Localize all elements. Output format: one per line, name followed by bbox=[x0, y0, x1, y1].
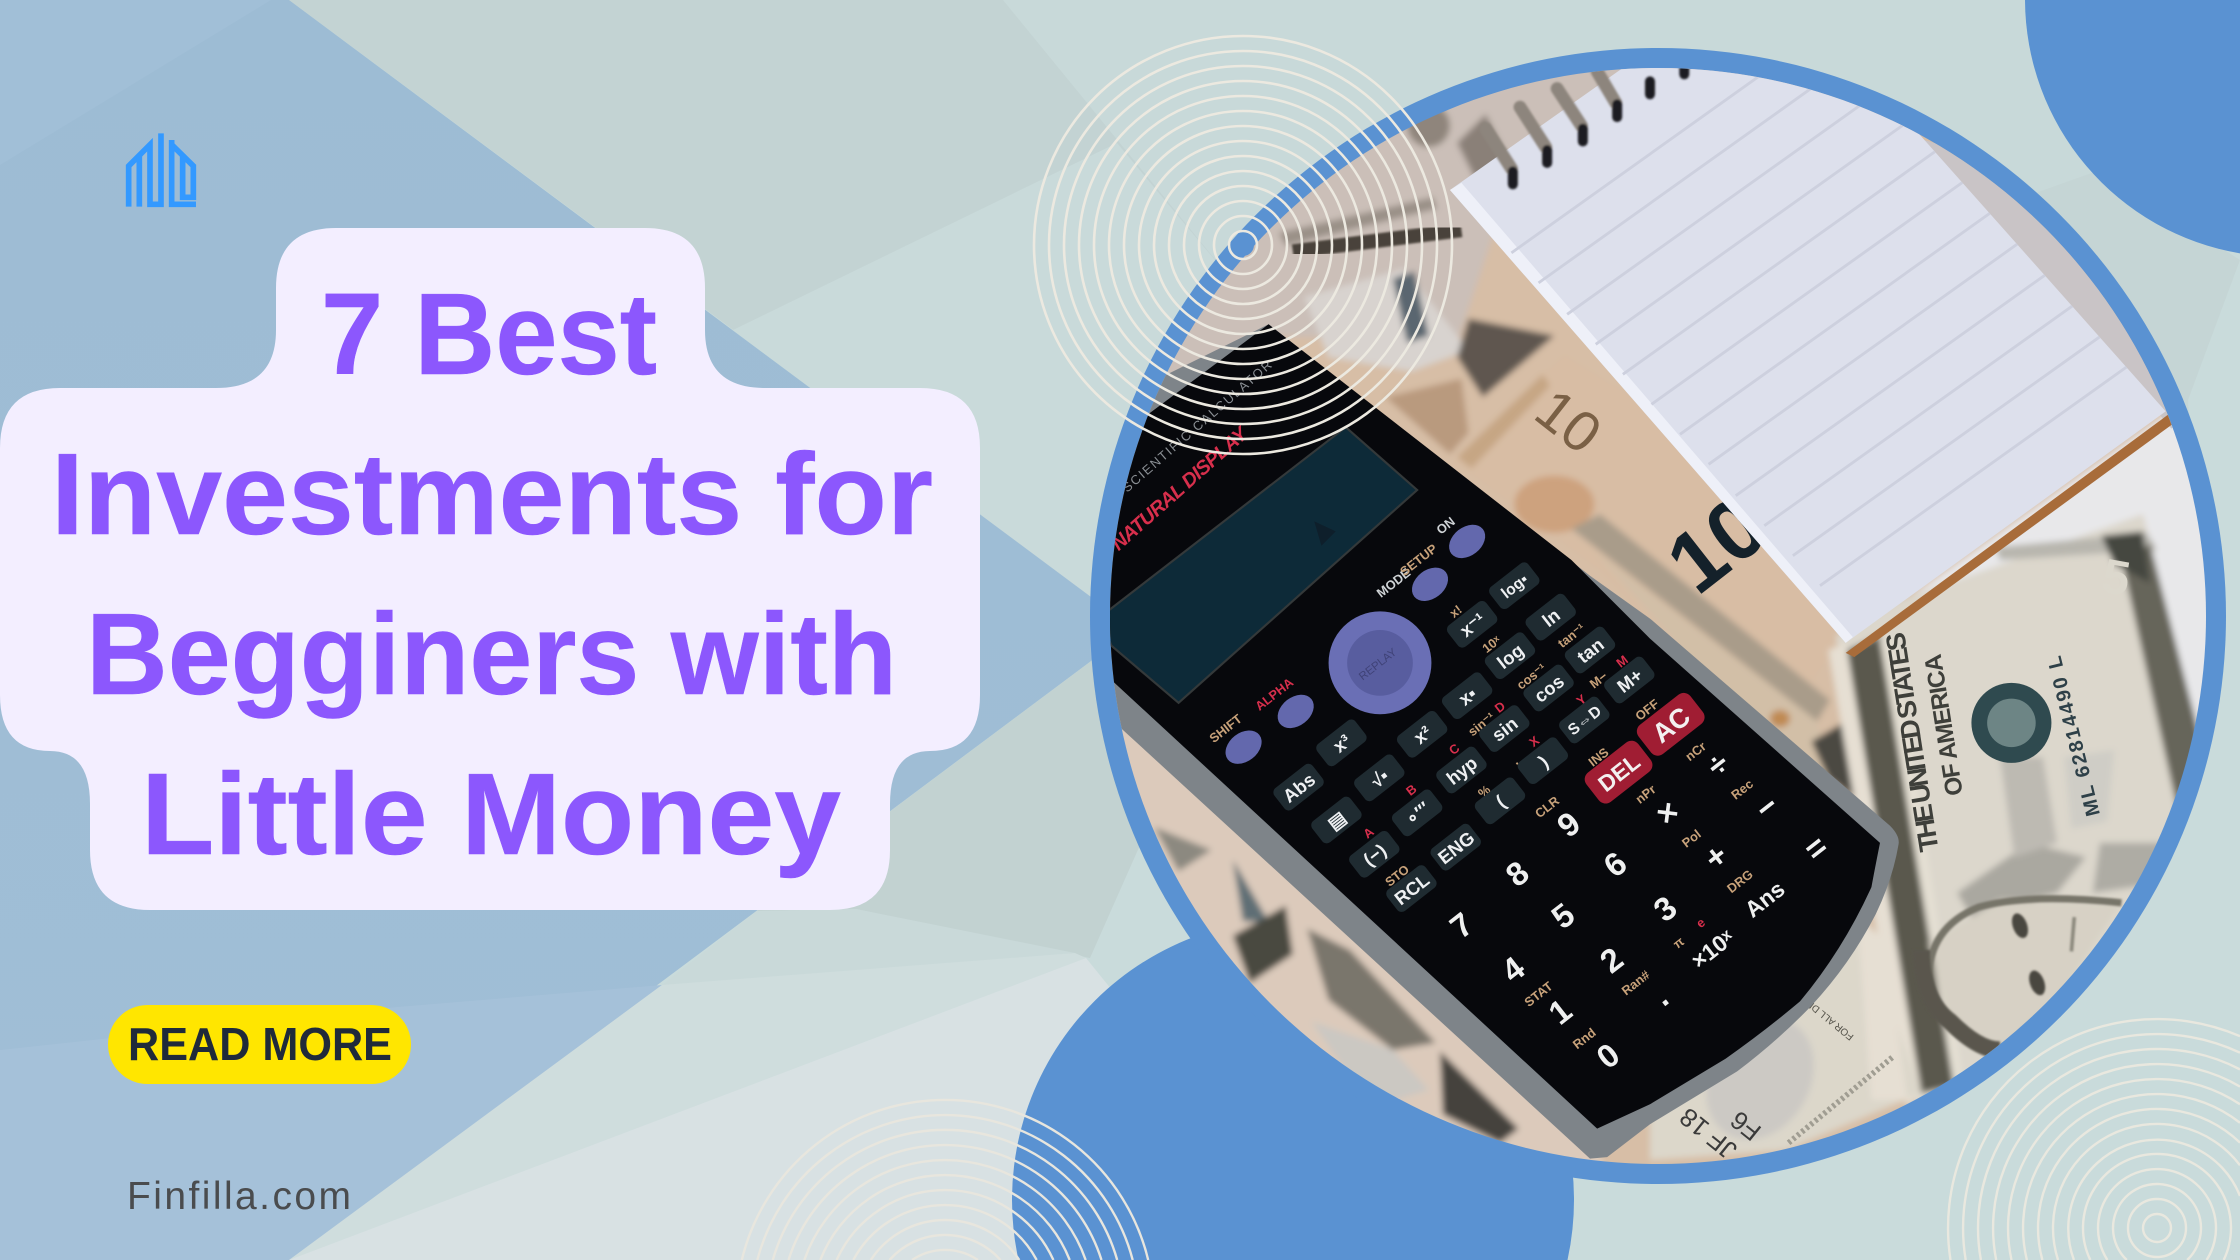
title panel bbox=[0, 228, 980, 910]
calculator body bbox=[1057, 324, 1880, 1129]
number keys: 2 bbox=[1593, 940, 1630, 980]
function keys: Abs bbox=[1279, 769, 1319, 807]
small key captions: Rnd bbox=[1570, 1025, 1599, 1052]
function keys: x² bbox=[1410, 721, 1436, 748]
photo ring bbox=[1090, 48, 2226, 1184]
bill details: 10 bbox=[1650, 478, 1784, 612]
decorative blue circle bottom bbox=[1012, 919, 1574, 1260]
number keys: 4 bbox=[1494, 949, 1532, 989]
small key captions: Y bbox=[1573, 691, 1590, 708]
small key captions: D bbox=[1492, 698, 1508, 716]
small key captions: X bbox=[1526, 732, 1542, 750]
small key captions: x! bbox=[1446, 602, 1465, 621]
number keys: + bbox=[1697, 836, 1735, 877]
small key captions bbox=[1206, 514, 1756, 1052]
number keys: 9 bbox=[1550, 804, 1587, 844]
title text: Little Money bbox=[141, 749, 841, 879]
bill details: F6 bbox=[1726, 1105, 1767, 1146]
function keys: ( bbox=[1491, 791, 1510, 812]
function keys bbox=[1271, 560, 1657, 914]
read more button: READ MORE bbox=[128, 1018, 392, 1070]
small key captions: 10ˣ bbox=[1479, 632, 1504, 656]
function keys: sin bbox=[1488, 713, 1522, 746]
function keys: (−) bbox=[1359, 839, 1390, 870]
small key captions: cos⁻¹ bbox=[1514, 660, 1549, 693]
read more button bbox=[108, 1005, 411, 1084]
small key captions: π bbox=[1670, 934, 1687, 952]
small key captions: SETUP bbox=[1397, 540, 1440, 579]
number keys: 8 bbox=[1499, 853, 1536, 894]
bill details: FOR ALL DEBTS bbox=[1789, 985, 1856, 1042]
small key captions: MODE bbox=[1374, 565, 1414, 600]
function keys: ENG bbox=[1434, 827, 1478, 868]
number keys: . bbox=[1645, 978, 1675, 1013]
function keys: cos bbox=[1530, 670, 1568, 707]
number keys bbox=[1443, 744, 1835, 1076]
number keys: 5 bbox=[1544, 895, 1581, 936]
number keys: ÷ bbox=[1699, 744, 1736, 784]
bill details: 10 bbox=[1523, 377, 1613, 467]
small key captions: C bbox=[1446, 740, 1462, 758]
concentric rings bottom right bbox=[1948, 1019, 2240, 1260]
small key captions: OFF bbox=[1632, 696, 1662, 724]
function keys: RCL bbox=[1390, 869, 1433, 909]
function keys: √▪ bbox=[1367, 765, 1393, 792]
bill details: ML 62814490 L bbox=[2044, 654, 2105, 818]
small key captions: Rec bbox=[1728, 776, 1756, 802]
title text bbox=[51, 269, 933, 879]
bill details: THE UNITED STATES bbox=[1879, 630, 1944, 854]
small key captions: ALPHA bbox=[1252, 675, 1296, 714]
decorative blue circle top right bbox=[2025, 0, 2240, 253]
logo icon: building mark bbox=[129, 133, 196, 207]
concentric rings bottom centre bbox=[742, 1100, 1148, 1260]
function keys: ) bbox=[1534, 751, 1552, 771]
function keys: ▤ bbox=[1323, 807, 1350, 834]
function keys: log▪ bbox=[1498, 571, 1532, 602]
small key captions: A bbox=[1360, 824, 1377, 841]
small key captions: sin⁻¹ bbox=[1465, 709, 1498, 739]
brand: NATURAL DISPLAY bbox=[1107, 422, 1253, 555]
small key captions: e bbox=[1693, 915, 1708, 931]
number keys: 7 bbox=[1443, 905, 1480, 945]
notepad bbox=[1450, 68, 2172, 657]
small key captions: Ran# bbox=[1619, 967, 1653, 998]
bill details: JF 18 bbox=[1675, 1102, 1742, 1164]
small key captions: ON bbox=[1433, 514, 1458, 537]
spiral binding bbox=[1486, 66, 1684, 184]
circular photo: calculator, notepad and dollar bills bbox=[1110, 68, 2206, 1164]
brand: SCIENTIFIC CALCULATOR bbox=[1119, 357, 1275, 495]
function keys: S⇔D bbox=[1565, 703, 1605, 739]
number keys: 3 bbox=[1646, 888, 1684, 929]
website label: Finfilla.com bbox=[127, 1175, 351, 1218]
small key captions: Pol bbox=[1679, 826, 1704, 850]
small key captions: M bbox=[1613, 652, 1631, 670]
function keys: x▪ bbox=[1454, 683, 1481, 710]
number keys: = bbox=[1797, 827, 1835, 868]
brand bbox=[1107, 357, 1275, 555]
function keys: x⁻¹ bbox=[1456, 608, 1489, 641]
function keys: log bbox=[1493, 639, 1528, 673]
round purple keys bbox=[1219, 518, 1492, 771]
small key captions: STAT bbox=[1521, 978, 1556, 1010]
replay pad: REPLAY bbox=[1357, 646, 1400, 683]
bill details: OF AMERICA bbox=[1920, 652, 1969, 798]
title text: Begginers with bbox=[86, 589, 897, 719]
number keys: ×10ˣ bbox=[1686, 924, 1740, 974]
calculator shell bbox=[1057, 324, 1899, 1159]
small key captions: nCr bbox=[1682, 739, 1709, 764]
small key captions: SHIFT bbox=[1206, 711, 1245, 746]
calculator bbox=[1057, 324, 1899, 1159]
small key captions: B bbox=[1403, 781, 1420, 799]
function keys: ln bbox=[1538, 604, 1564, 631]
small key captions: tan⁻¹ bbox=[1555, 620, 1588, 651]
function keys: tan bbox=[1573, 634, 1608, 667]
small key captions: % bbox=[1475, 781, 1494, 801]
concentric rings over the photo bbox=[1034, 36, 1452, 454]
display bbox=[1100, 427, 1417, 703]
small key captions: nPr bbox=[1633, 782, 1659, 807]
small key captions: , bbox=[1509, 754, 1521, 768]
number keys: − bbox=[1748, 786, 1785, 827]
replay pad bbox=[1329, 611, 1431, 714]
function keys: hyp bbox=[1442, 752, 1481, 789]
title text: 7 Best bbox=[321, 269, 657, 399]
red keys bbox=[1584, 692, 1705, 804]
function keys: x³ bbox=[1329, 730, 1355, 757]
small key captions: DRG bbox=[1724, 867, 1756, 896]
number keys: Ans bbox=[1740, 875, 1790, 923]
pen bbox=[1293, 230, 1461, 251]
red keys: AC bbox=[1646, 700, 1696, 749]
bill details: 5 bbox=[2098, 549, 2134, 607]
number keys: 1 bbox=[1541, 991, 1579, 1032]
small key captions: M− bbox=[1587, 668, 1610, 691]
title text: Investments for bbox=[51, 429, 933, 559]
bill details bbox=[1523, 377, 2134, 1164]
number keys: 6 bbox=[1596, 844, 1634, 884]
number keys: 0 bbox=[1589, 1035, 1626, 1076]
small key captions: STO bbox=[1382, 862, 1412, 890]
small key captions: CLR bbox=[1532, 792, 1563, 821]
number keys: × bbox=[1648, 792, 1686, 833]
function keys: M+ bbox=[1613, 664, 1647, 697]
function keys: ∘′″ bbox=[1401, 797, 1434, 829]
photo backdrop: bills bbox=[1086, 43, 2229, 1186]
red keys: DEL bbox=[1593, 748, 1645, 797]
small key captions: INS bbox=[1585, 744, 1612, 769]
